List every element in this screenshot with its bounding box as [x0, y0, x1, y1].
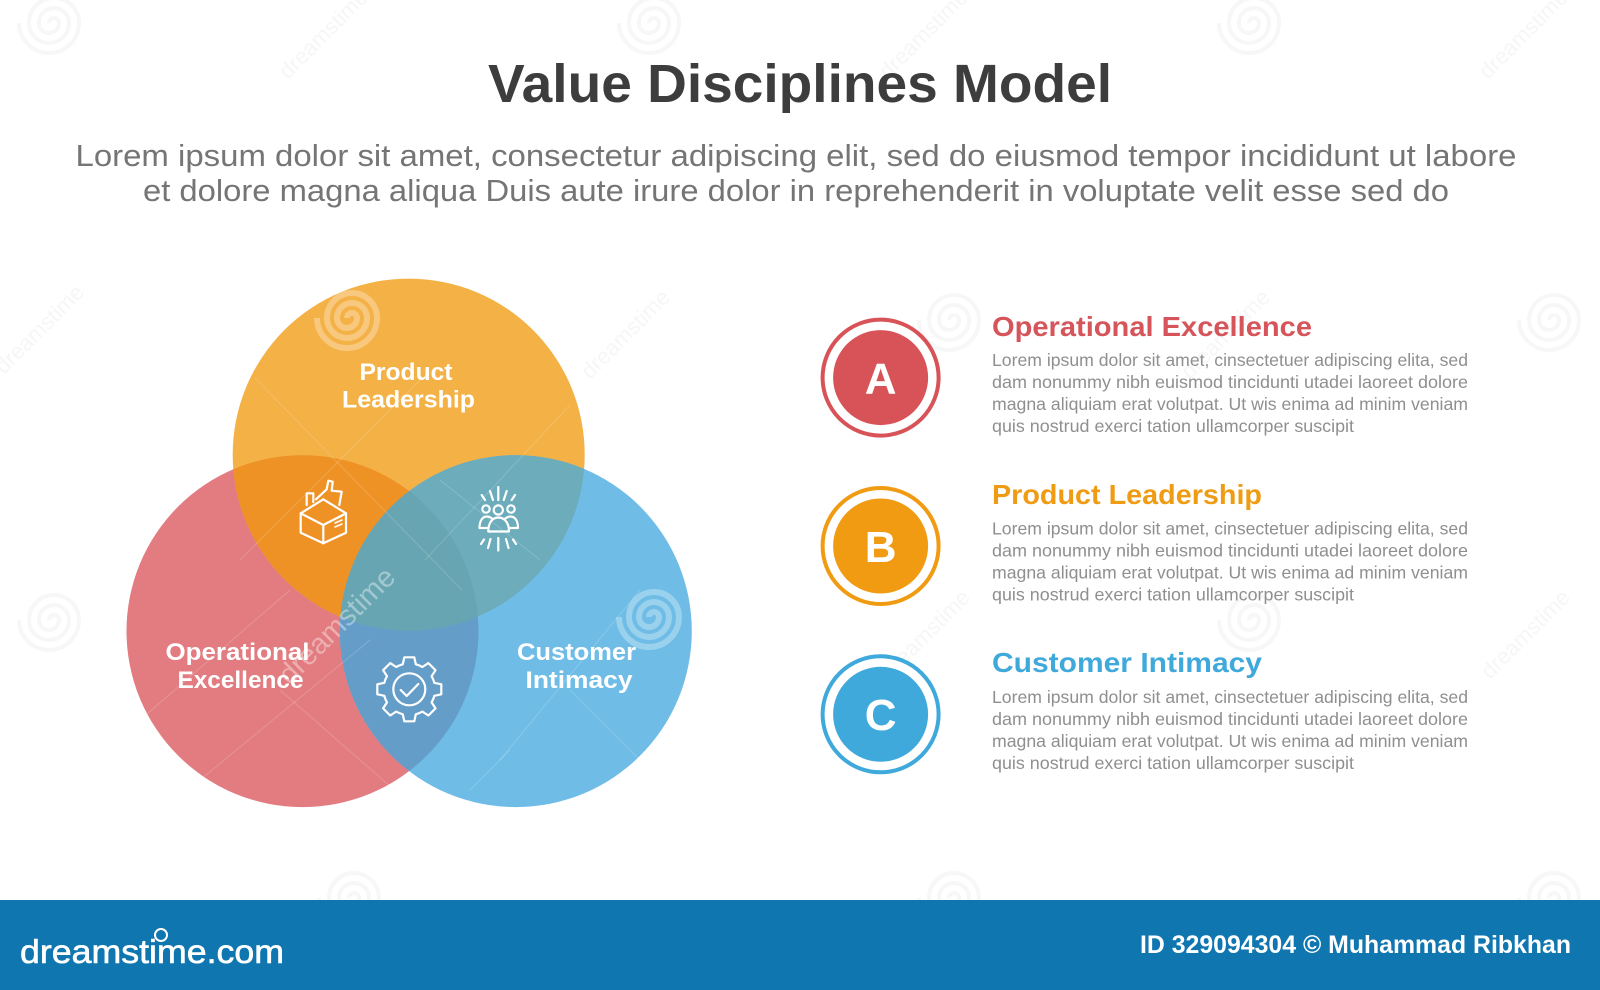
- background watermark text: [0, 0, 1575, 684]
- overlap: centre: [340, 491, 478, 630]
- description A: [992, 350, 1468, 436]
- overlap: operational and customer: [340, 491, 478, 771]
- icon: people group: [480, 487, 518, 550]
- badge A: [823, 320, 939, 436]
- watermark text on centre: dreamstime: [272, 561, 402, 691]
- legend item A: operational excellence: [823, 311, 1468, 436]
- circle: operational excellence: [126, 455, 478, 807]
- description C: Lorem ipsum dolor sit amet, cinsectetuer adipiscing elita, sed: [992, 687, 1468, 707]
- icon: box with thumbs up: [301, 481, 346, 543]
- circle: product leadership: [233, 279, 585, 631]
- watermark lines on circles: [140, 378, 640, 830]
- legend item B: product leadership: [823, 479, 1468, 604]
- description C: dam nonummy nibh euismod tincidunti utadei laoreet dolore: [992, 709, 1468, 729]
- label: operational excellence: Operational: [166, 639, 310, 666]
- heading A: Operational Excellence: [992, 311, 1312, 342]
- badge C: [823, 656, 939, 772]
- watermark spirals on circles: [317, 293, 679, 647]
- background watermark text: dreamstime: [576, 285, 675, 384]
- label: operational excellence: [166, 639, 310, 694]
- description C: magna aliquiam erat volutpat. Ut wis enima ad minim veniam: [992, 731, 1468, 751]
- label: customer intimacy: [517, 639, 636, 694]
- label: product leadership: Product: [360, 359, 453, 386]
- background watermark text: dreamstime: [876, 585, 975, 684]
- description A: dam nonummy nibh euismod tincidunti utadei laoreet dolore: [992, 372, 1468, 392]
- badge C: C: [865, 691, 896, 740]
- description B: Lorem ipsum dolor sit amet, cinsectetuer adipiscing elita, sed: [992, 518, 1468, 538]
- description C: [992, 687, 1468, 773]
- label: operational excellence: Excellence: [178, 667, 304, 694]
- icon: gear with check: [377, 657, 441, 721]
- description B: quis nostrud exerci tation ullamcorper suscipit: [992, 584, 1354, 604]
- subtitle text block: [76, 138, 1516, 208]
- subtitle text block: Lorem ipsum dolor sit amet, consectetur adipiscing elit, sed do eiusmod tempor incididunt ut labore: [76, 138, 1516, 173]
- overlap: product and operational: [233, 455, 409, 617]
- label: customer intimacy: Customer: [517, 639, 636, 666]
- label: product leadership: [342, 359, 475, 414]
- heading C: Customer Intimacy: [992, 647, 1262, 678]
- overlap: product and customer: [340, 455, 584, 616]
- description B: [992, 518, 1468, 604]
- footer banner: [0, 900, 1600, 990]
- subtitle text block: et dolore magna aliqua Duis aute irure dolor in reprehenderit in voluptate velit esse sed do: [143, 173, 1449, 208]
- badge B: [823, 488, 939, 604]
- heading B: Product Leadership: [992, 479, 1262, 510]
- circle: customer intimacy: [340, 455, 692, 807]
- footer logo: dreamstime.com: [20, 933, 284, 970]
- label: product leadership: Leadership: [342, 386, 475, 414]
- title: Value Disciplines Model: [488, 54, 1112, 114]
- badge A: A: [865, 354, 896, 404]
- description A: Lorem ipsum dolor sit amet, cinsectetuer adipiscing elita, sed: [992, 350, 1468, 370]
- description B: dam nonummy nibh euismod tincidunti utadei laoreet dolore: [992, 540, 1468, 560]
- background watermark text: dreamstime: [1176, 285, 1275, 384]
- description C: quis nostrud exerci tation ullamcorper suscipit: [992, 753, 1354, 773]
- background watermark text: dreamstime: [1476, 585, 1575, 684]
- legend item C: customer intimacy: [823, 647, 1468, 773]
- label: customer intimacy: Intimacy: [526, 667, 633, 694]
- badge B: B: [865, 523, 896, 572]
- description B: magna aliquiam erat volutpat. Ut wis enima ad minim veniam: [992, 562, 1468, 582]
- venn diagram: [126, 279, 692, 830]
- description A: quis nostrud exerci tation ullamcorper suscipit: [992, 416, 1354, 436]
- description A: magna aliquiam erat volutpat. Ut wis enima ad minim veniam: [992, 394, 1468, 414]
- footer credit: ID 329094304 © Muhammad Ribkhan: [1140, 931, 1571, 959]
